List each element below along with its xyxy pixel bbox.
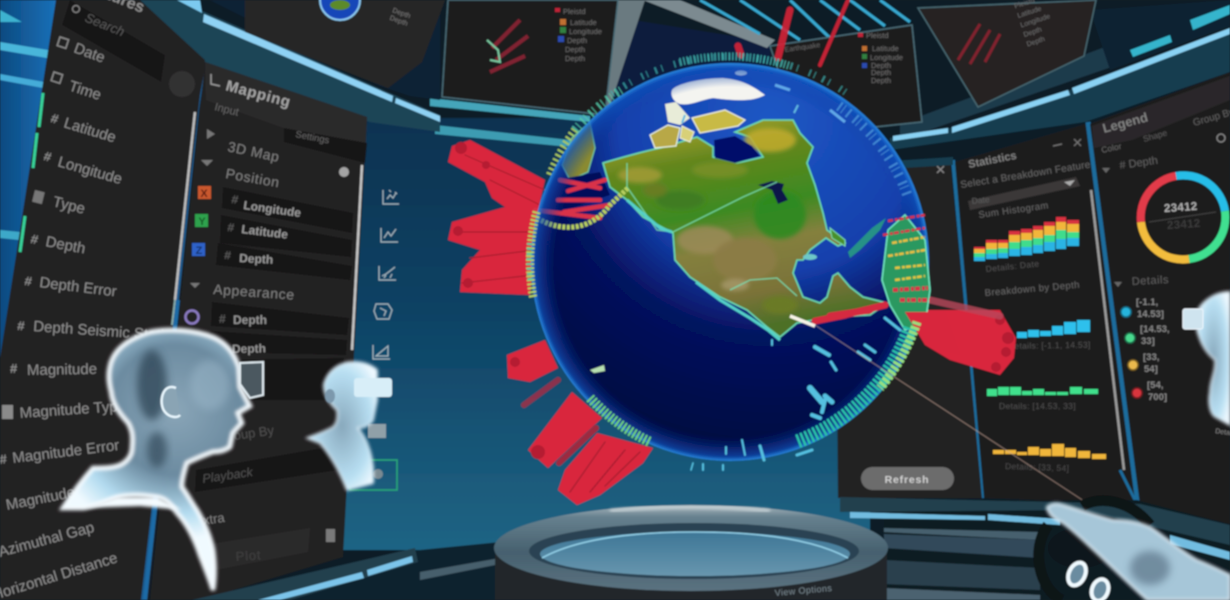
feature labels: # (17, 318, 26, 334)
Caribbean islands (803, 218, 886, 260)
feature labels: Latitude (62, 115, 118, 146)
Greenland ice cap (671, 78, 765, 104)
panel: legend (1090, 72, 1230, 525)
refresh button (861, 467, 954, 490)
feature labels: # (49, 110, 61, 127)
appearance labels: Extra (193, 510, 226, 529)
statistics title: Select a Breakdown Feature (960, 160, 1091, 191)
green breakdown bars (987, 387, 1098, 411)
top panel: plot with legend 2: Depth (871, 61, 891, 70)
central pedestal (494, 505, 888, 600)
feature labels: Depth Error (39, 274, 118, 300)
large avatar (63, 330, 263, 590)
feature labels: # (24, 273, 34, 289)
feature labels: # (42, 148, 54, 165)
top panel: plot with legend 1: Depth (565, 45, 585, 54)
globe (529, 56, 960, 470)
controller (1039, 500, 1150, 600)
top panel: plot with legend 2: Earthquake (784, 42, 821, 54)
top panel: plot with legend 1: Pleistd (563, 7, 586, 16)
donut total: 23412 (1164, 201, 1198, 215)
top panel: small globe view: Depth (391, 7, 411, 20)
statistics title: Statistics (967, 150, 1018, 171)
right-side red bars over sphere (905, 312, 960, 355)
left wall (0, 0, 56, 360)
mapping labels: # (224, 248, 232, 262)
details heading (1114, 274, 1169, 288)
bars far side top (738, 0, 848, 65)
legend title and tabs: Legend (1101, 109, 1149, 136)
top panel: plot with legend 1: Depth (565, 54, 585, 63)
feature labels: Longitude (56, 154, 124, 188)
appearance labels: # (219, 312, 226, 326)
top panel: plot with legend 1 (442, 0, 618, 115)
floor and lower ledge (190, 497, 1230, 600)
Siberia tip (562, 122, 595, 180)
donut total: 23412 (1167, 218, 1201, 232)
appearance labels: Depth (233, 313, 267, 327)
feature labels: Magnitude Error (5, 477, 113, 514)
arctic islands (650, 70, 747, 148)
mapping labels (190, 129, 349, 303)
upper right ticks on sphere (682, 85, 908, 197)
feature labels: Magnitude Error (11, 437, 120, 467)
feature labels: Depth (44, 233, 87, 258)
feature labels: Date (72, 40, 107, 67)
eastern margin land (882, 215, 930, 330)
legend items: 700] (1148, 392, 1167, 403)
axis badges: Z (196, 245, 203, 257)
legend title and tabs: # Depth (1119, 155, 1159, 172)
North America landmass (603, 120, 887, 337)
lower-left cluster (507, 340, 558, 382)
blue breakdown bars: Details: [-1.1, 14.53] (1008, 340, 1091, 351)
controller ray (790, 316, 1090, 505)
mapping labels: Longitude (243, 198, 302, 220)
details heading: Details (1132, 274, 1169, 288)
top panel: plot with legend 1: Depth (567, 36, 587, 45)
top panel: plot with legend 2: Longitude (870, 53, 903, 62)
legend items: [54, (1147, 380, 1163, 391)
sum histogram: Details: Date (985, 258, 1040, 274)
colour ring icon (186, 310, 198, 324)
trash icon (326, 529, 335, 542)
legend items: [-1.1, (1136, 297, 1158, 308)
rim spikes outside the sphere (550, 56, 848, 175)
mapping labels: # (231, 192, 239, 207)
borders (627, 163, 797, 296)
panel: features list (0, 0, 206, 600)
land texture (618, 128, 806, 314)
tabs (213, 101, 330, 147)
dropdown (968, 177, 1080, 210)
appearance labels: Depth (232, 341, 266, 356)
breakdown by depth heading: Breakdown by Depth (984, 280, 1080, 299)
headset visor (240, 362, 263, 398)
appearance labels: Playback (201, 465, 254, 486)
Hudson Bay (714, 136, 760, 163)
central american trench bars (815, 305, 885, 321)
legend items: 54] (1144, 364, 1158, 375)
small avatar (307, 362, 392, 490)
top panel: far right plot: Depth (1023, 26, 1043, 39)
feature labels: Magnitude (27, 361, 97, 379)
feature labels: Depth Seismic Station (33, 318, 181, 345)
Great Lakes (758, 181, 788, 204)
legend items (1121, 297, 1170, 403)
search and features heading (72, 0, 147, 39)
feature labels: # (29, 231, 40, 247)
fingers (1065, 560, 1089, 588)
red depth bars behind globe (448, 0, 1016, 505)
upper-left cluster (448, 140, 545, 295)
sphere (531, 63, 929, 461)
top panel: plot with legend 2: Pleistd (866, 31, 889, 40)
mapping labels: Appearance (213, 281, 295, 303)
ceiling band left (140, 0, 440, 132)
mapping labels: Position (224, 165, 281, 190)
top panel: far right plot: Latitude (1017, 5, 1043, 20)
position rows (195, 187, 353, 572)
feature labels: # (10, 361, 18, 376)
top panel: small globe view (245, 0, 445, 88)
legend items: 14.53] (1137, 309, 1164, 320)
tabs: Input (213, 101, 240, 119)
axis badges: Y (198, 216, 206, 228)
donut total (1164, 201, 1201, 232)
mapping title: Mapping (224, 77, 293, 111)
right cluster (905, 310, 1016, 375)
appearance labels: Group By (218, 422, 275, 445)
sum histogram: Sum Histogram (978, 200, 1049, 221)
Alaska water with red bars on globe face (550, 172, 610, 208)
depth donut chart (1141, 175, 1225, 259)
appearance labels: Plot (235, 547, 262, 564)
feature labels: Magnitude Type (19, 398, 126, 422)
yellow breakdown bars (993, 444, 1106, 473)
filter button (169, 71, 195, 97)
ear (162, 387, 180, 417)
Hawaii islands (590, 365, 605, 373)
pedestal label: View Options (774, 583, 833, 598)
feature labels (0, 37, 181, 600)
axis badges (192, 186, 211, 257)
panel: statistics (955, 122, 1138, 504)
vertical toolbar icons (350, 190, 399, 490)
top panel: small globe view: Depth (389, 15, 409, 28)
mapping labels: Depth (239, 251, 274, 267)
green breakdown bars: Details: [14.53, 33] (999, 401, 1076, 411)
legend items: [33, (1143, 352, 1159, 363)
axis badges: X (200, 188, 208, 200)
blue breakdown bars (1008, 320, 1091, 351)
top panel: plot with legend 1: Latitude (570, 18, 597, 27)
hand (1047, 504, 1230, 600)
feature labels: Time (67, 78, 103, 104)
green selected markers (20, 93, 43, 252)
top panel: plot with legend 1: Longitude (569, 27, 602, 36)
statistics title (960, 139, 1091, 191)
sum histogram (974, 200, 1079, 274)
top panel: plot with legend 2: Latitude (872, 44, 899, 53)
legend title and tabs: Color (1100, 141, 1122, 155)
feature labels: Type (51, 193, 87, 218)
top panel: plot with legend 2: Depth (871, 68, 891, 77)
mapping labels: Latitude (241, 222, 289, 242)
legend title and tabs: Shape (1142, 127, 1168, 144)
legend title and tabs (1100, 107, 1230, 173)
top panel: plot with legend 2: Depth (871, 76, 891, 85)
tabs: Settings (294, 129, 330, 147)
VR hand with controller (1039, 500, 1230, 600)
lower right rim data (529, 210, 917, 442)
top panel: far right plot (918, 0, 1096, 107)
dropdown: Date (971, 194, 990, 206)
rim glow (531, 63, 929, 461)
top panel: far right plot: Depth (1026, 36, 1046, 48)
ceiling band right (890, 0, 1230, 150)
top panel: far right plot: Longitude (1020, 13, 1051, 29)
top panel: plot with legend 2 (770, 25, 922, 135)
pacific coast glow (627, 200, 780, 340)
yellow breakdown bars: Details: [33, 54] (1005, 461, 1069, 473)
legend items: [14.53, (1140, 324, 1170, 335)
panel: mapping (145, 62, 367, 600)
appearance labels (193, 312, 275, 564)
panel: view behind globe (833, 157, 984, 498)
refresh button: Refresh (885, 474, 929, 486)
mapping labels: # (227, 220, 235, 235)
mapping labels: 3D Map (226, 138, 281, 165)
right avatar (1183, 292, 1230, 438)
search and features heading: Search (83, 10, 127, 39)
Pacific bars and islands on sphere (691, 318, 900, 470)
Aleutian arc (537, 188, 628, 227)
legend items: 33] (1141, 336, 1155, 347)
